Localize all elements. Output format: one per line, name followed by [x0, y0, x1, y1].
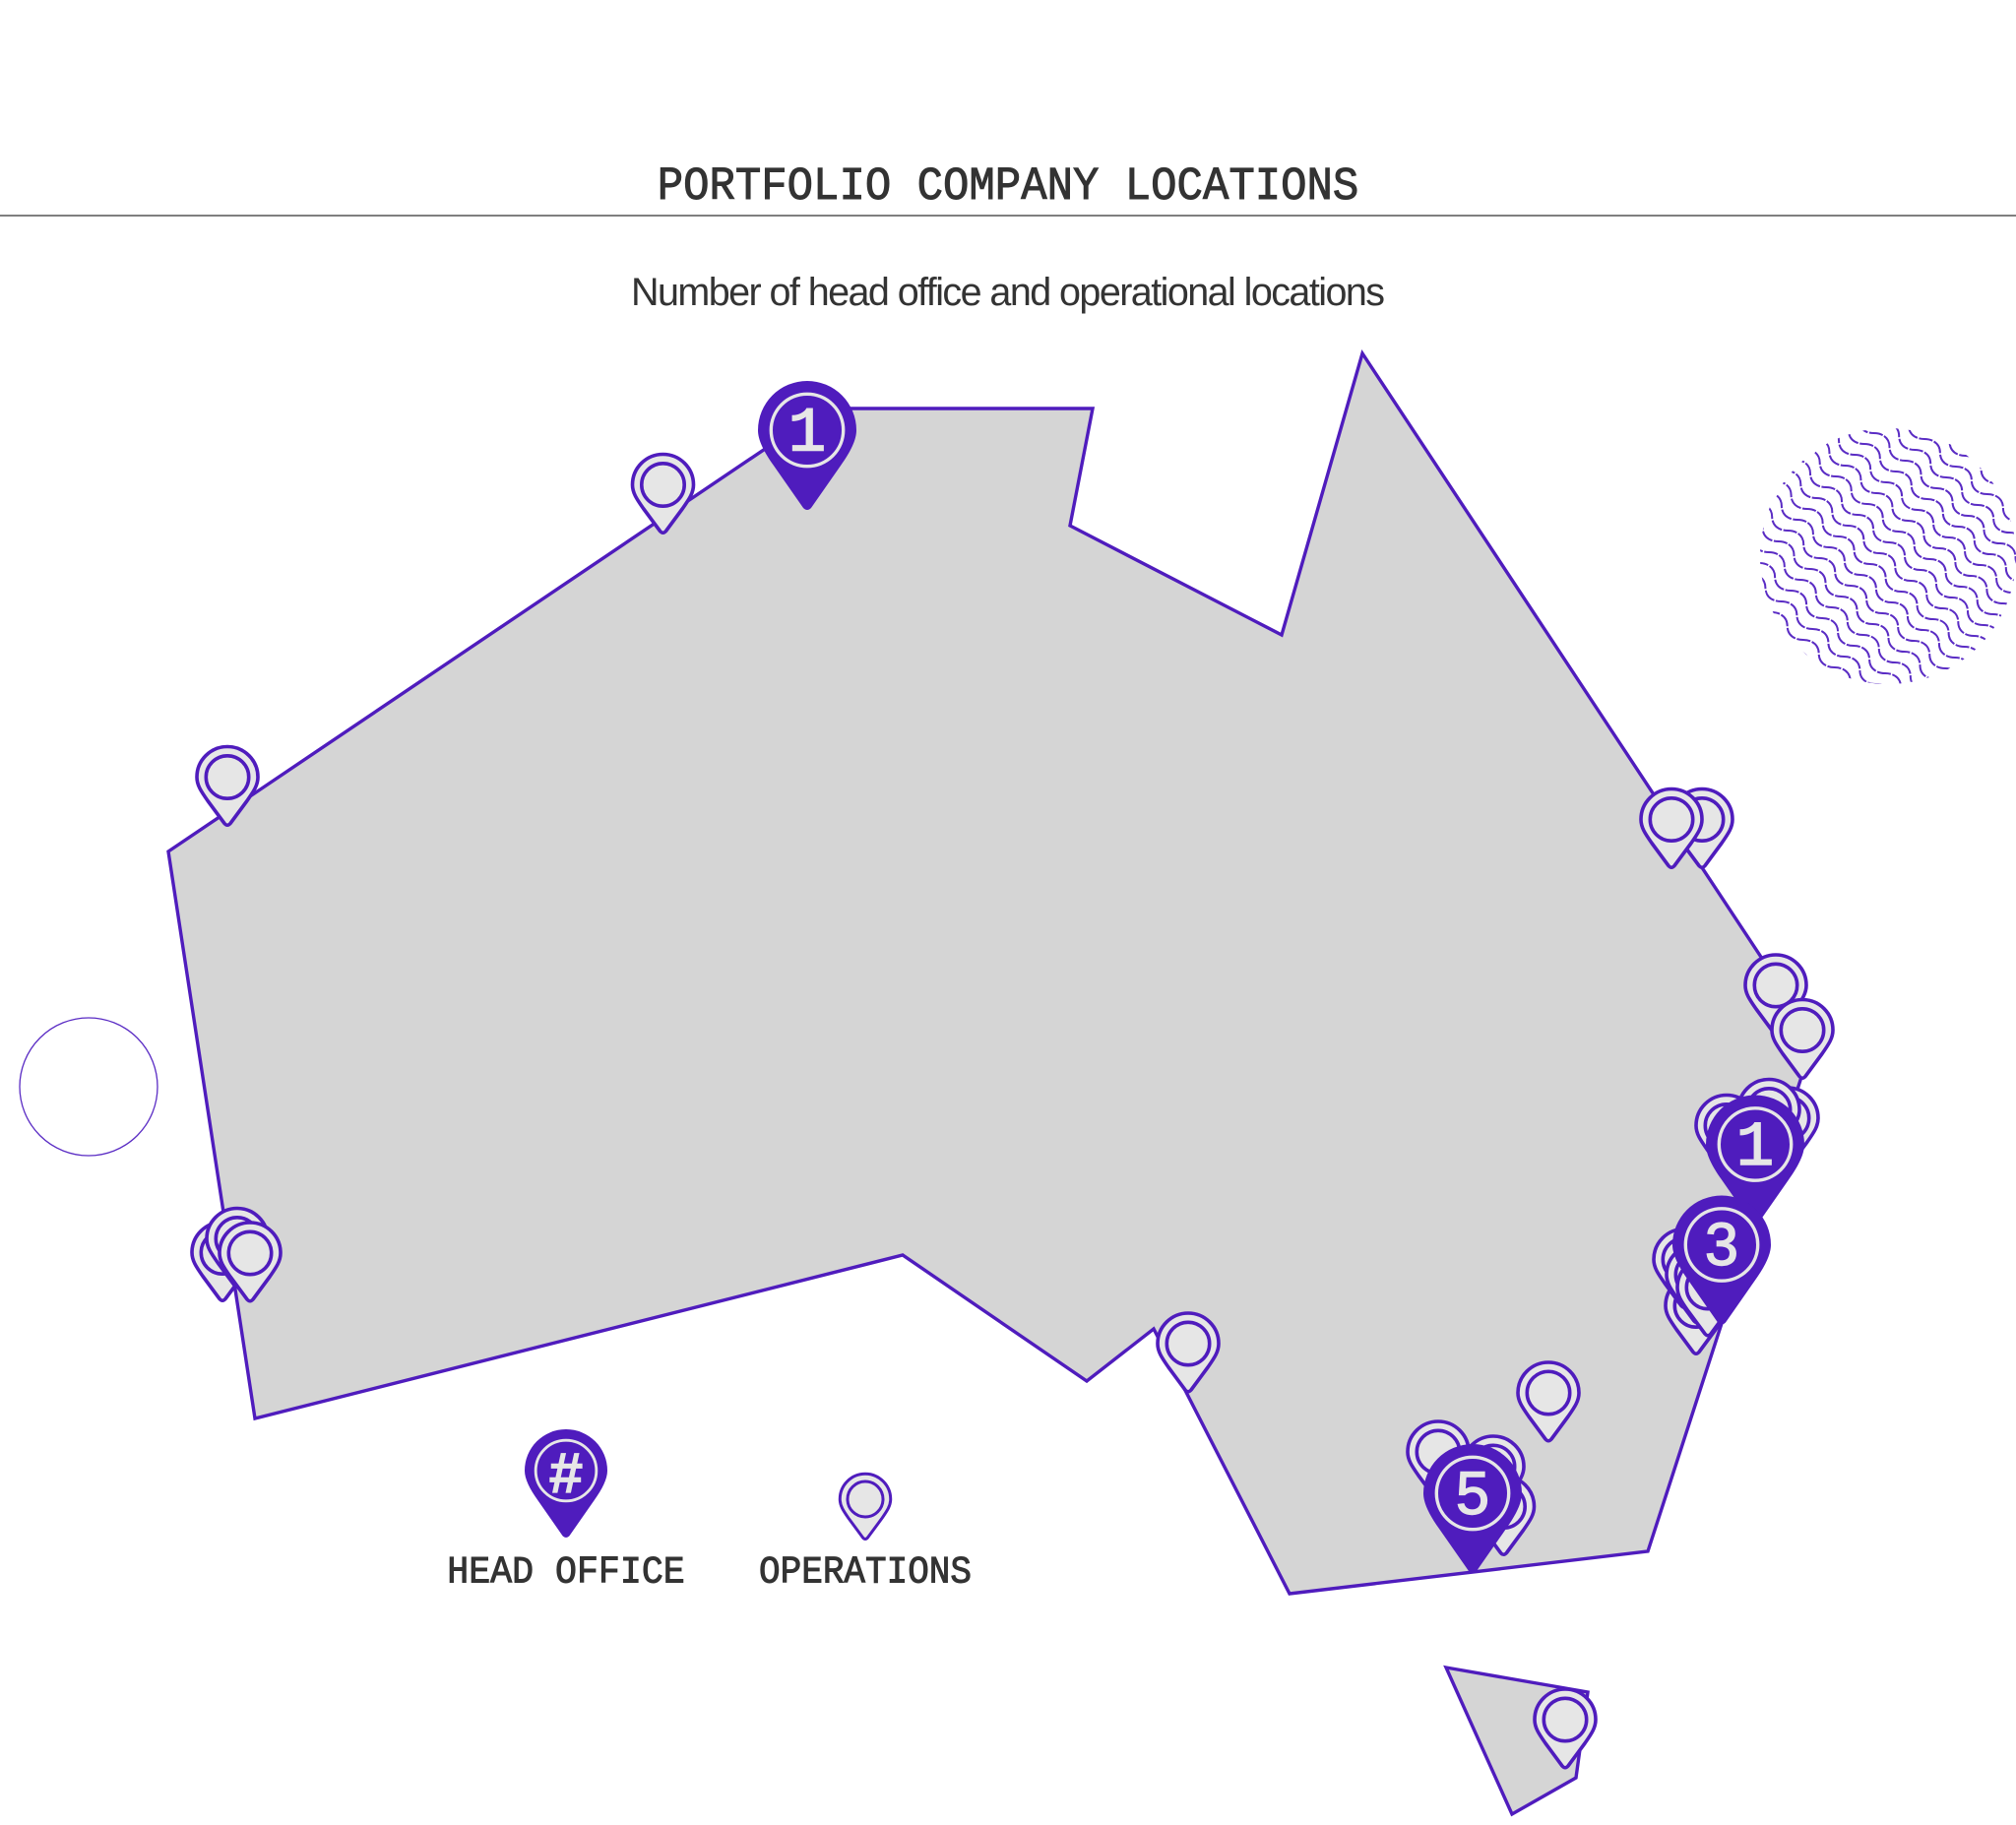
head office pin: Darwin, 1	[758, 381, 856, 510]
decorative wave circle	[1760, 428, 2016, 684]
head office pin: Sydney, 3	[1672, 1195, 1771, 1325]
operations pins: south-west cluster	[192, 1209, 281, 1301]
operations pins: Melbourne cluster	[1408, 1421, 1534, 1554]
operations pins: Sydney cluster	[1654, 1228, 1738, 1353]
legend: head office	[447, 1429, 685, 1595]
map: Tasmania	[1446, 1668, 1588, 1814]
map: Australia mainland	[168, 353, 1814, 1594]
head office pin: Sydney, 3: 3	[1705, 1211, 1738, 1278]
operations pins: north Queensland	[1641, 789, 1732, 867]
icon: head office pin	[525, 1429, 607, 1538]
icon: operations pin	[840, 1474, 891, 1539]
head office label: HEAD OFFICE	[447, 1550, 685, 1595]
decorative outline circle	[20, 1018, 158, 1156]
operations pins: central Queensland	[1745, 955, 1833, 1078]
legend: operations	[759, 1474, 972, 1595]
operations pin: north coast	[632, 455, 693, 533]
operations label: OPERATIONS	[759, 1552, 972, 1595]
title: PORTFOLIO COMPANY LOCATIONS	[658, 160, 1358, 213]
operations pins: Brisbane cluster	[1696, 1079, 1818, 1173]
head office pin: Brisbane, 1: 1	[1736, 1113, 1774, 1184]
head office hash glyph: #	[548, 1444, 584, 1511]
operations pin: north-west coast	[197, 746, 258, 825]
operations pin: Adelaide region	[1158, 1313, 1219, 1392]
head office pin: Darwin, 1: 1	[788, 400, 826, 471]
subtitle: Number of head office and operational locations	[631, 271, 1385, 314]
operations pin: Tasmania	[1535, 1689, 1596, 1768]
head office pin: Brisbane, 1	[1706, 1095, 1804, 1225]
head office pin: Melbourne, 5: 5	[1456, 1460, 1489, 1527]
head office pin: Melbourne, 5	[1423, 1444, 1522, 1573]
operations pin: Victoria north	[1518, 1362, 1579, 1441]
